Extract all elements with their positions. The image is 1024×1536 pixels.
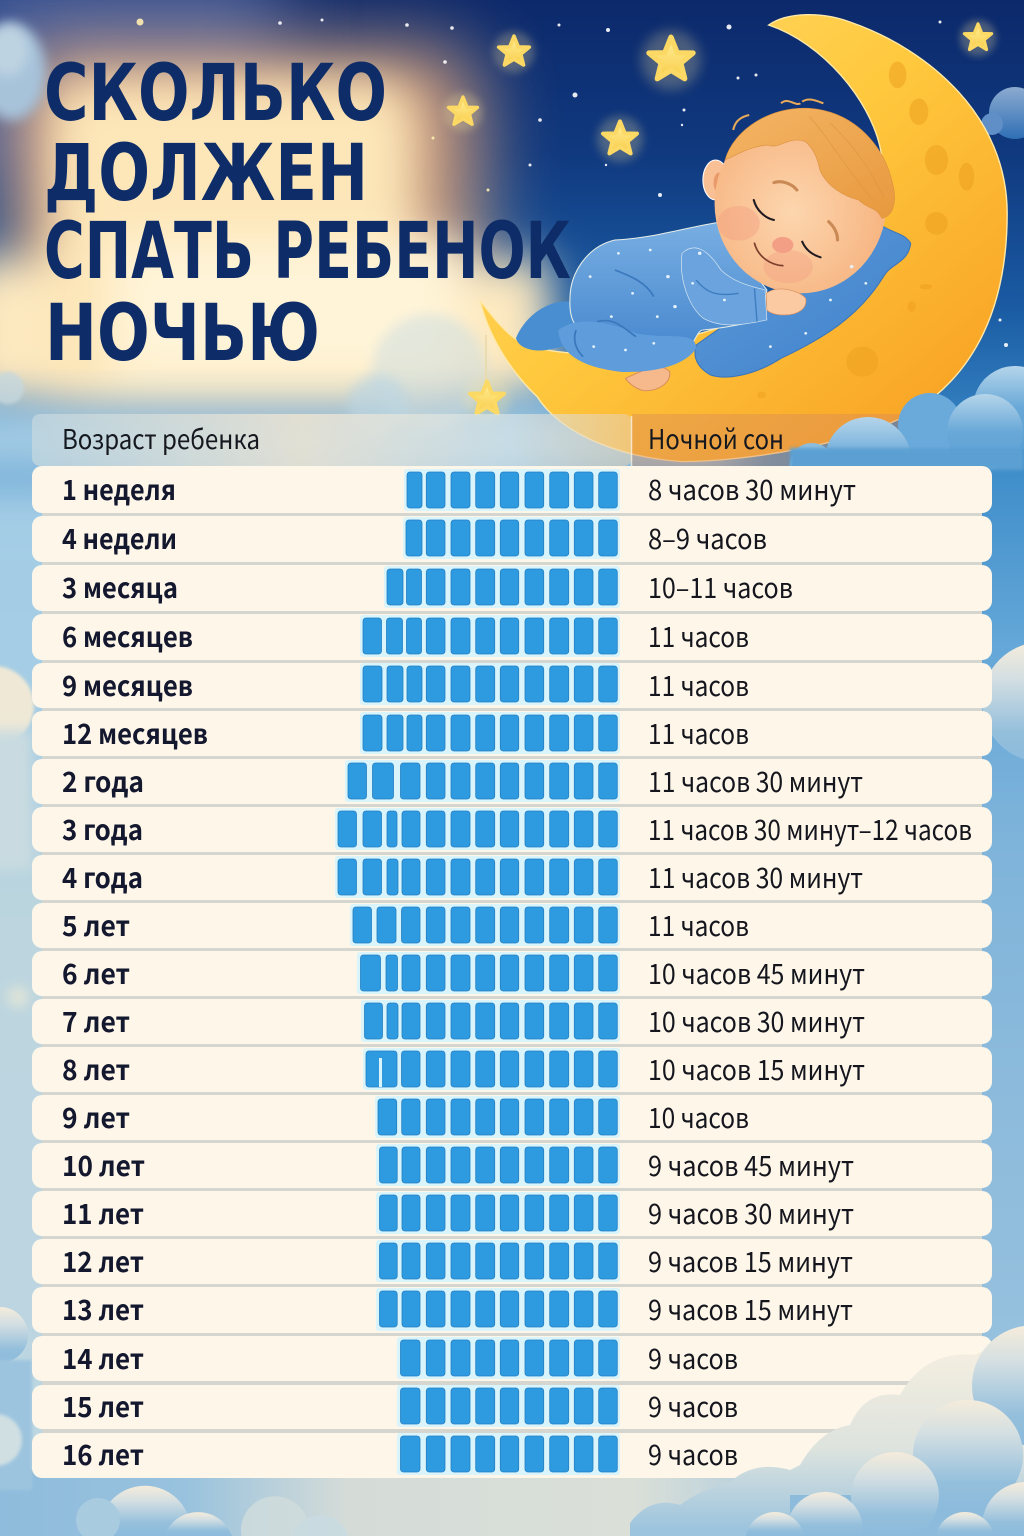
table header band <box>32 414 912 466</box>
table row: 12 лет: 9 часов 15 минут <box>648 1241 853 1281</box>
pajama leg <box>558 321 696 372</box>
table row: 2 года <box>32 759 992 804</box>
icon: star <box>443 92 483 132</box>
head <box>703 160 728 200</box>
column heading: age: Возраст ребенка <box>62 418 260 457</box>
table row: 1 неделя <box>32 466 992 513</box>
table row: 4 года <box>32 855 992 900</box>
table row: 4 года: 11 часов 30 минут <box>648 857 863 897</box>
table row: 15 лет: 9 часов <box>648 1386 738 1426</box>
table row: 1 неделя: 1 неделя <box>62 469 176 509</box>
title: СКОЛЬКО <box>44 49 387 139</box>
table row: 12 месяцев: 12 месяцев <box>62 713 208 753</box>
table row: 13 лет: 13 лет <box>62 1289 144 1329</box>
table row: 10 лет: 10 лет <box>62 1145 145 1185</box>
table row: 1 неделя: 8 часов 30 минут <box>648 469 856 509</box>
table row: 11 лет: 9 часов 30 минут <box>648 1193 854 1233</box>
pajama foot <box>516 302 576 351</box>
table row: 12 лет <box>32 1239 992 1284</box>
table row: 14 лет: 9 часов <box>648 1338 738 1378</box>
icon: star <box>641 30 701 90</box>
table row: 6 лет: 6 лет <box>62 953 130 993</box>
table row: 3 года: 3 года <box>62 809 143 849</box>
table row: 15 лет: 15 лет <box>62 1386 144 1426</box>
table row: 11 лет <box>32 1191 992 1236</box>
table row: 3 года <box>32 807 992 852</box>
table row: 6 лет <box>32 951 992 996</box>
pillow <box>695 227 911 377</box>
table row: 6 месяцев <box>32 614 992 660</box>
clouds: bottom right over table <box>630 1326 1024 1536</box>
table row: 4 недели: 4 недели <box>62 518 177 558</box>
table row: 16 лет: 16 лет <box>62 1434 144 1474</box>
title: ДОЛЖЕН <box>44 129 368 219</box>
table row: 10 лет <box>32 1143 992 1188</box>
table row: 9 лет: 10 часов <box>648 1097 749 1137</box>
column heading: night sleep: Ночной сон <box>648 418 784 457</box>
table row: 9 лет <box>32 1095 992 1140</box>
table row: 5 лет <box>32 903 992 948</box>
icon: hanging star <box>464 335 510 422</box>
table row: 3 месяца <box>32 565 992 611</box>
clouds: bottom left <box>76 1486 349 1536</box>
table row: 10 лет: 9 часов 45 минут <box>648 1145 854 1185</box>
table row: 13 лет <box>32 1287 992 1333</box>
table row: 13 лет: 9 часов 15 минут <box>648 1289 853 1329</box>
table row: 12 лет: 12 лет <box>62 1241 144 1281</box>
clouds behind header right <box>790 366 1024 503</box>
table row: 8 лет <box>32 1047 992 1092</box>
bare foot <box>625 367 670 391</box>
icon: star <box>493 31 535 73</box>
table row: 12 месяцев: 11 часов <box>648 713 749 753</box>
sky sparkles <box>136 18 1008 347</box>
table row: 8 лет: 10 часов 15 минут <box>648 1049 865 1089</box>
table row: 9 месяцев: 9 месяцев <box>62 665 193 705</box>
table row: 14 лет <box>32 1336 992 1381</box>
table row: 9 лет: 9 лет <box>62 1097 130 1137</box>
table row: 6 лет: 10 часов 45 минут <box>648 953 865 993</box>
table row: 3 года: 11 часов 30 минут–12 часов <box>648 809 972 849</box>
table row: 2 года: 2 года <box>62 761 144 801</box>
clouds: middle sides <box>0 642 1024 1008</box>
icon: crescent moon with sleeping baby <box>480 15 1007 462</box>
pajama stars <box>589 249 867 351</box>
table row: 4 недели: 8–9 часов <box>648 518 767 558</box>
table row: 16 лет: 9 часов <box>648 1434 738 1474</box>
hair <box>725 108 895 218</box>
icon: star <box>597 116 643 162</box>
face: brows, eyes, nose, mouth <box>774 182 838 240</box>
table row: 16 лет <box>32 1433 992 1478</box>
table row: 5 лет: 11 часов <box>648 905 749 945</box>
title <box>44 49 571 379</box>
table row: 5 лет: 5 лет <box>62 905 130 945</box>
table row: 4 недели <box>32 516 992 562</box>
table row: 9 месяцев <box>32 663 992 708</box>
table row: 8 лет: 8 лет <box>62 1049 130 1089</box>
clouds: left edge beside last rows <box>0 1307 32 1490</box>
row separators backing <box>42 470 982 1470</box>
table row: 12 месяцев <box>32 711 992 756</box>
pajama body <box>570 223 767 343</box>
table row: 11 лет: 11 лет <box>62 1193 144 1233</box>
icon: star <box>960 20 996 56</box>
table row: 2 года: 11 часов 30 минут <box>648 761 863 801</box>
table row: 9 месяцев: 11 часов <box>648 665 749 705</box>
table row: 7 лет: 7 лет <box>62 1001 130 1041</box>
title: НОЧЬЮ <box>45 289 320 379</box>
table row: 6 месяцев: 6 месяцев <box>62 616 193 656</box>
table row: 6 месяцев: 11 часов <box>648 616 749 656</box>
table row: 15 лет <box>32 1385 992 1429</box>
table row: 14 лет: 14 лет <box>62 1338 144 1378</box>
title: СПАТЬ РЕБЕНОК <box>44 207 571 297</box>
table row: 4 года: 4 года <box>62 857 143 897</box>
table row: 3 месяца: 10–11 часов <box>648 567 793 607</box>
table row: 3 месяца: 3 месяца <box>62 567 178 607</box>
arm and hand <box>681 248 767 325</box>
clouds: upper corners and horizon <box>0 24 1024 435</box>
table row: 7 лет: 10 часов 30 минут <box>648 1001 865 1041</box>
table row: 7 лет <box>32 999 992 1044</box>
